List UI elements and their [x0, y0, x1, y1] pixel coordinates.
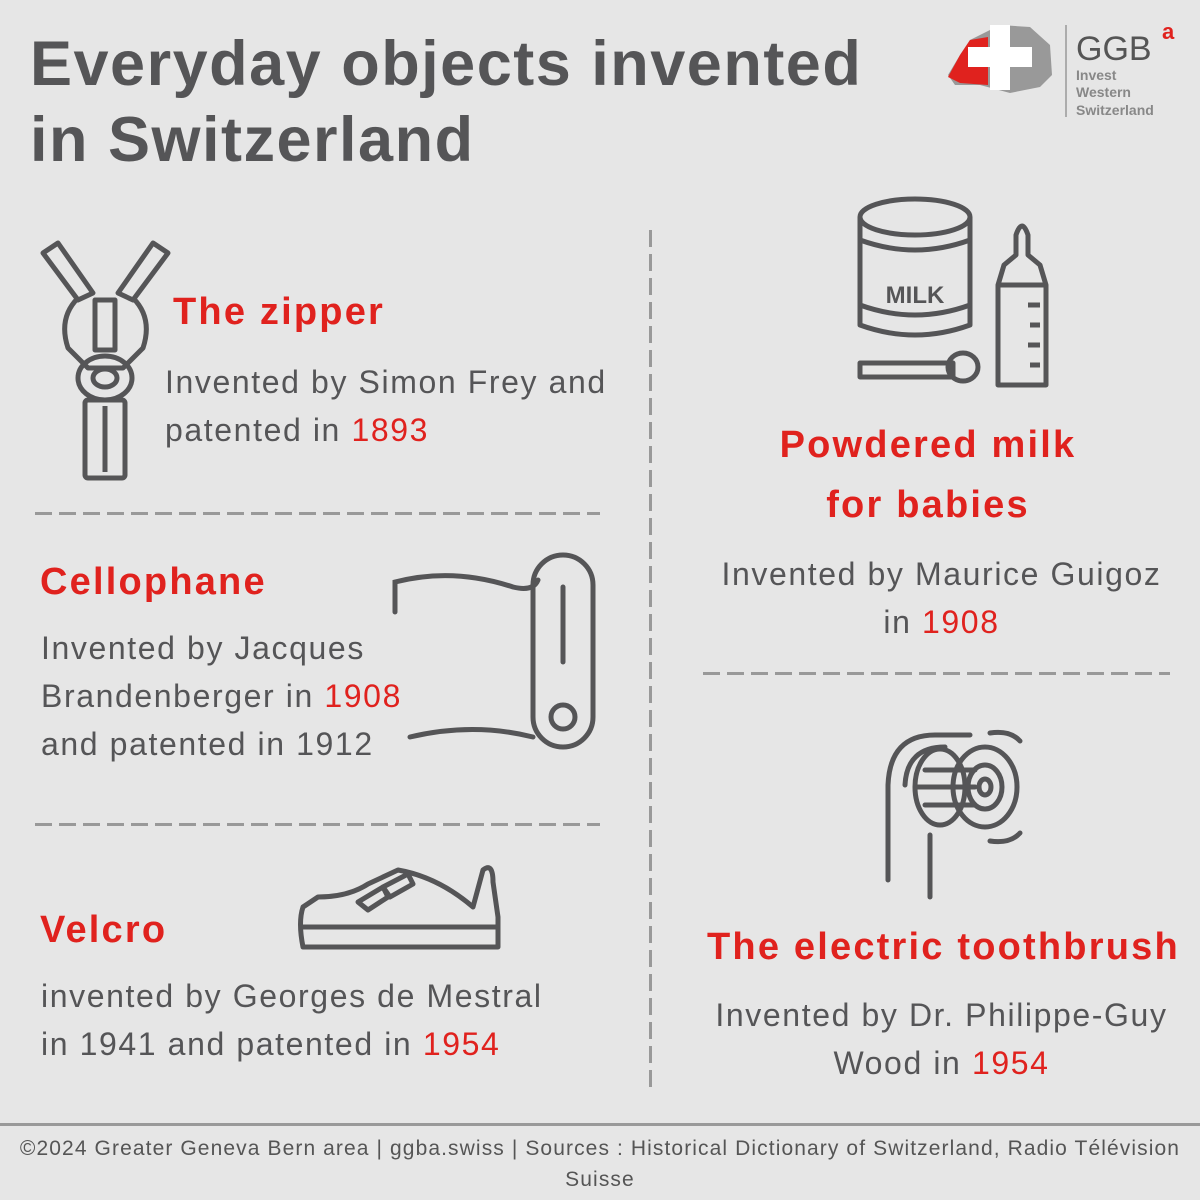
heading: The electric toothbrush: [707, 926, 1180, 968]
text: [41, 978, 543, 1062]
text: Invented by Maurice Guigoz: [721, 556, 1162, 592]
text: Brandenberger in 1908: [41, 678, 402, 714]
text: and patented in 1912: [41, 726, 374, 762]
panel: cellophane: [40, 552, 596, 762]
text: invented by Georges de Mestral: [41, 978, 543, 1014]
divider: [35, 823, 600, 826]
heading: Powdered milk: [780, 424, 1076, 466]
text: Wood in 1954: [833, 1045, 1050, 1081]
title: [30, 29, 862, 175]
logo: Switzerland: [1076, 102, 1154, 118]
panel: velcro: [40, 865, 543, 1062]
text: in 1908: [883, 604, 1000, 640]
text: in 1941 and patented in 1954: [41, 1026, 500, 1062]
text: Suisse: [565, 1168, 635, 1191]
divider: [35, 512, 600, 515]
heading: The zipper: [173, 291, 385, 333]
text: Invented by Dr. Philippe-Guy: [715, 997, 1168, 1033]
vertical divider: [649, 230, 652, 1090]
panel: powdered milk: [721, 196, 1162, 640]
text: [715, 997, 1168, 1081]
icon: toothbrush head: [886, 730, 1022, 900]
panel: zipper: [40, 240, 607, 480]
logo: Invest: [1076, 67, 1117, 83]
logo: a: [1162, 19, 1175, 44]
heading: Cellophane: [40, 561, 267, 603]
icon: milk jar and bottle: [858, 196, 1048, 388]
text: ©2024 Greater Geneva Bern area | ggba.swiss | Sources : Historical Dictionary of Switzerland, Radio Télévision: [20, 1137, 1180, 1160]
text: [165, 364, 607, 448]
footer: [0, 1123, 1200, 1126]
divider: [703, 672, 1170, 675]
icon: shoe: [298, 865, 500, 950]
heading: [780, 424, 1076, 526]
text: [721, 556, 1162, 640]
text: patented in 1893: [165, 412, 429, 448]
panel: electric toothbrush: [707, 730, 1180, 1081]
title: in Switzerland: [30, 105, 475, 175]
icon: zipper: [40, 240, 170, 480]
text: Invented by Jacques: [41, 630, 365, 666]
logo: [948, 19, 1175, 118]
heading: for babies: [826, 484, 1030, 526]
heading: Velcro: [40, 909, 167, 951]
title: Everyday objects invented: [30, 29, 862, 99]
icon: roll: [392, 552, 596, 750]
logo: Western: [1076, 84, 1131, 100]
icon: milk jar and bottle: MILK: [886, 282, 945, 309]
text: [41, 630, 402, 762]
logo: GGB: [1076, 30, 1152, 68]
text: Invented by Simon Frey and: [165, 364, 607, 400]
